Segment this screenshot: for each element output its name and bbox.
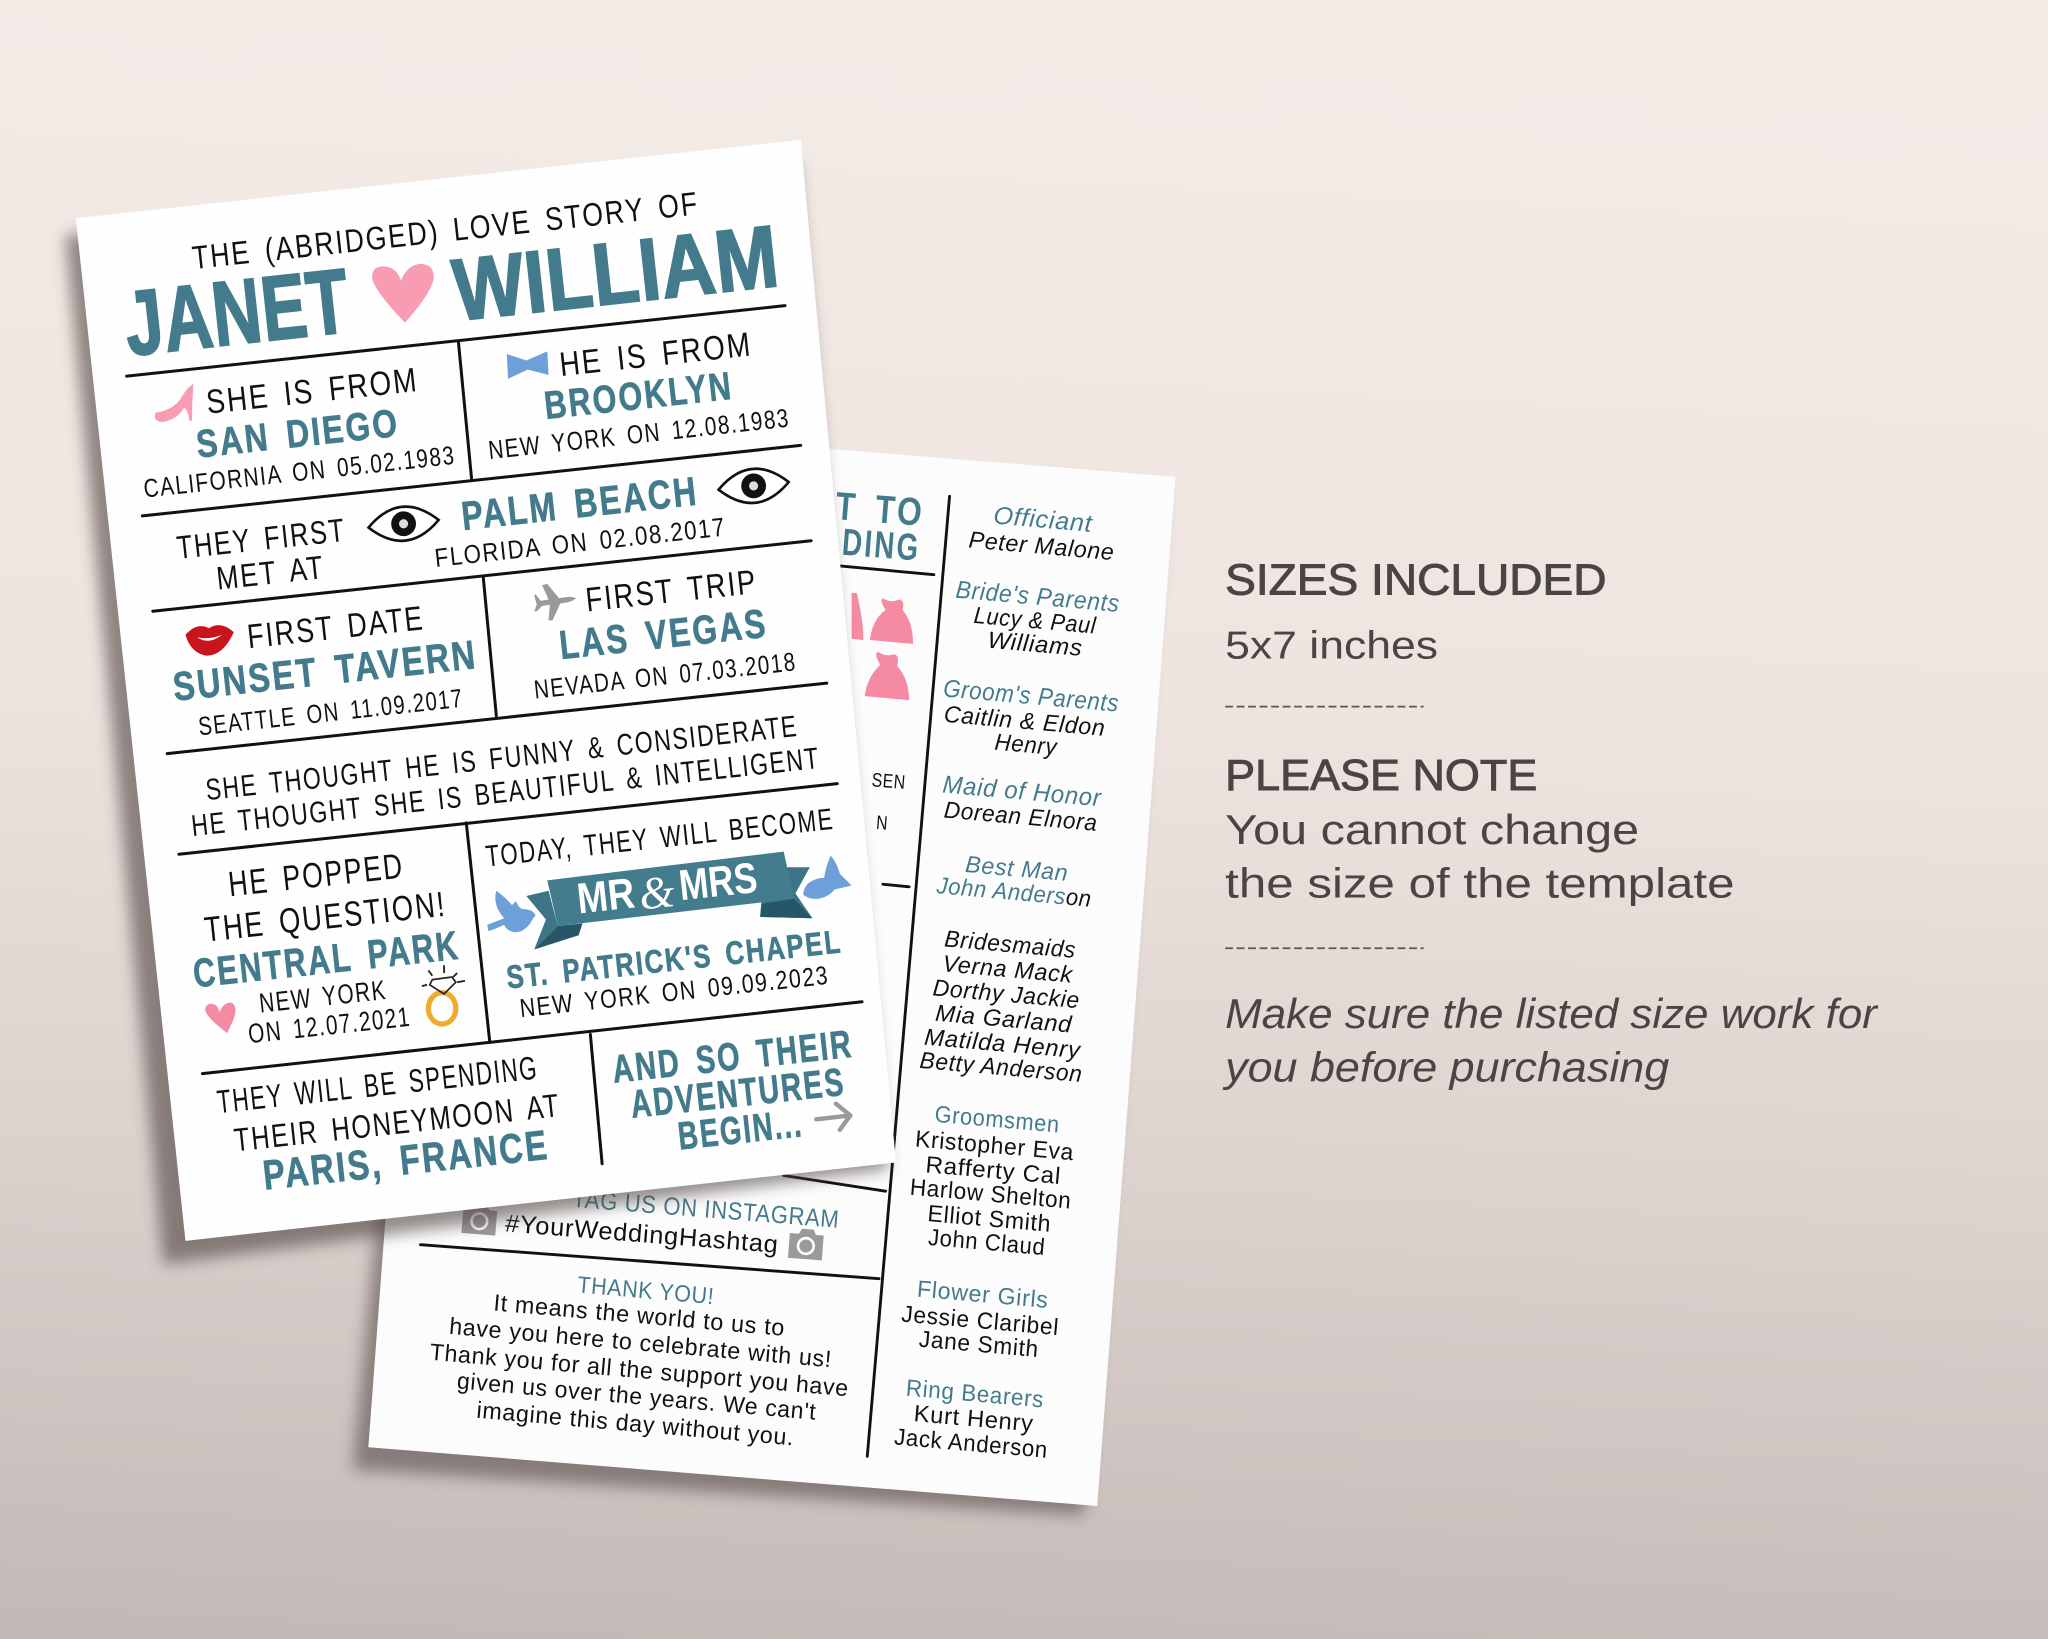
grooms parents: Groom's Parents bbox=[942, 675, 1120, 718]
proposal text: HE POPPED bbox=[226, 847, 406, 904]
section: honeymoon bbox=[215, 1049, 562, 1199]
date: NEW YORK bbox=[258, 974, 388, 1019]
size value: 5x7 inches bbox=[1225, 624, 1438, 667]
honeymoon text: THEY WILL BE SPENDING bbox=[215, 1049, 540, 1120]
icon: small heart bbox=[205, 1003, 235, 1033]
groomsman name: John Claud bbox=[927, 1224, 1047, 1260]
icon: plane bbox=[534, 584, 576, 620]
first met text: MET AT bbox=[215, 548, 326, 597]
back card shadow bbox=[353, 438, 1162, 1515]
bridesmaid name: Matilda Henry bbox=[923, 1024, 1082, 1063]
icon: camera right bbox=[788, 1228, 824, 1260]
fragment text: SEN bbox=[871, 769, 906, 794]
date: FLORIDA ON 02.08.2017 bbox=[433, 512, 727, 573]
section: she is from bbox=[142, 361, 457, 504]
place: CENTRAL PARK bbox=[191, 922, 462, 996]
maid of honor name: Dorean Elnora bbox=[943, 797, 1099, 836]
note line: the size of the template bbox=[1225, 859, 1735, 906]
name: William: WILLIAM bbox=[448, 207, 783, 340]
date: SEATTLE ON 11.09.2017 bbox=[197, 683, 465, 741]
section: adventures bbox=[610, 1023, 855, 1159]
icon: pink dress bbox=[865, 652, 909, 700]
icon: dove left bbox=[487, 891, 536, 932]
he is from text: HE IS FROM bbox=[558, 325, 754, 384]
icon: heart bbox=[372, 264, 434, 323]
hashtag: #YourWeddingHashtag bbox=[504, 1210, 780, 1259]
heading: sizes included: SIZES INCLUDED bbox=[1225, 556, 1607, 604]
groomsman name: Rafferty Cal bbox=[925, 1151, 1062, 1189]
icon: diamond ring bbox=[422, 965, 465, 1024]
maid of honor: Maid of Honor bbox=[941, 771, 1104, 812]
groomsmen: Groomsmen bbox=[934, 1101, 1061, 1138]
title line: THE (ABRIDGED) LOVE STORY OF bbox=[190, 184, 701, 276]
today text: TODAY, THEY WILL BECOME bbox=[484, 803, 836, 874]
thank you line: It means the world to us to bbox=[493, 1289, 786, 1341]
banner bbox=[526, 852, 812, 950]
icon: bow tie bbox=[507, 351, 549, 379]
first met text: THEY FIRST bbox=[175, 511, 348, 566]
section: mr and mrs bbox=[484, 803, 852, 1023]
best man: Best Man bbox=[964, 851, 1069, 886]
bridesmaid name: Verna Mack bbox=[942, 950, 1074, 988]
arrow bbox=[816, 1104, 850, 1130]
ring bearers: Ring Bearers bbox=[905, 1375, 1045, 1412]
place: SUNSET TAVERN bbox=[171, 631, 479, 710]
section: first trip bbox=[532, 563, 798, 705]
back card dividers bbox=[421, 496, 950, 1456]
ring bearer name: Jack Anderson bbox=[893, 1423, 1049, 1463]
proposal text: THE QUESTION! bbox=[202, 885, 448, 950]
italic note line: you before purchasing bbox=[1222, 1043, 1669, 1090]
honeymoon text: THEIR HONEYMOON AT bbox=[232, 1086, 562, 1158]
thank you line: have you here to celebrate with us! bbox=[448, 1313, 833, 1372]
back heading fragment: DING bbox=[841, 522, 922, 570]
bridesmaid name: Dorthy Jackie bbox=[932, 974, 1081, 1013]
banner text: MRS bbox=[677, 854, 760, 910]
note line: You cannot change bbox=[1225, 806, 1639, 853]
front card shadow bbox=[65, 163, 888, 1264]
thank you line: imagine this day without you. bbox=[476, 1397, 795, 1450]
panel: notes bbox=[1222, 556, 1879, 1090]
date: NEW YORK ON 09.09.2023 bbox=[518, 960, 830, 1023]
bridesmaid name: Mia Garland bbox=[934, 1000, 1073, 1038]
first date text: FIRST DATE bbox=[245, 599, 426, 656]
best man name: John Anderson bbox=[935, 872, 1093, 912]
she is from text: SHE IS FROM bbox=[204, 361, 420, 422]
bridesmaids: Bridesmaids bbox=[943, 926, 1077, 963]
brides parents name: Williams bbox=[987, 627, 1084, 661]
closing line: BEGIN... bbox=[676, 1102, 805, 1159]
section: proposal bbox=[191, 847, 465, 1049]
icon: dove right bbox=[803, 856, 852, 899]
groomsman name: Elliot Smith bbox=[926, 1200, 1052, 1237]
section: he is from bbox=[487, 325, 791, 465]
first trip text: FIRST TRIP bbox=[584, 563, 759, 619]
icon: eye right bbox=[717, 465, 791, 507]
place: PARIS, FRANCE bbox=[261, 1121, 551, 1199]
icon: high heel bbox=[155, 384, 193, 422]
brides parents name: Lucy & Paul bbox=[973, 602, 1097, 639]
grooms parents name: Caitlin & Eldon bbox=[943, 701, 1107, 741]
place: ST. PATRICK'S CHAPEL bbox=[505, 922, 844, 996]
section: first date bbox=[171, 599, 479, 741]
panel: back card bbox=[353, 418, 1176, 1515]
place: SAN DIEGO bbox=[194, 402, 401, 467]
bridesmaid name: Betty Anderson bbox=[919, 1047, 1084, 1087]
officiant name: Peter Malone bbox=[968, 527, 1116, 565]
flower girl name: Jane Smith bbox=[918, 1326, 1040, 1362]
instagram heading: TAG US ON INSTAGRAM bbox=[571, 1186, 840, 1234]
groomsman name: Kristopher Eva bbox=[914, 1125, 1075, 1165]
groomsman name: Harlow Shelton bbox=[909, 1174, 1073, 1214]
thank you line: Thank you for all the support you have bbox=[429, 1339, 850, 1401]
place: PALM BEACH bbox=[459, 468, 700, 539]
icon: pink dress bbox=[870, 598, 913, 644]
italic note line: Make sure the listed size work for bbox=[1225, 990, 1879, 1037]
front card dividers bbox=[127, 306, 862, 1164]
ring bearer name: Kurt Henry bbox=[913, 1400, 1035, 1437]
thank you heading: THANK YOU! bbox=[576, 1271, 715, 1309]
icon: lips gap bbox=[197, 635, 222, 641]
front card paper bbox=[76, 140, 896, 1241]
section: she thought he thought bbox=[190, 710, 822, 843]
place: LAS VEGAS bbox=[557, 600, 770, 668]
banner text: MR bbox=[575, 869, 637, 923]
grooms parents name: Henry bbox=[994, 729, 1059, 760]
banner ampersand: & bbox=[636, 865, 677, 920]
heading: please note: PLEASE NOTE bbox=[1225, 752, 1537, 800]
she thought: SHE THOUGHT HE IS FUNNY & CONSIDERATE bbox=[204, 710, 800, 807]
panel: front card bbox=[65, 140, 896, 1264]
icon: camera left bbox=[461, 1203, 498, 1236]
officiant: Officiant bbox=[992, 502, 1094, 538]
flower girl name: Jessie Claribel bbox=[900, 1301, 1060, 1340]
thank you line: given us over the years. We can't bbox=[456, 1367, 817, 1425]
closing line: AND SO THEIR bbox=[610, 1023, 855, 1092]
fragment text: N bbox=[875, 812, 889, 835]
flower girls: Flower Girls bbox=[916, 1276, 1050, 1313]
brides parents: Bride's Parents bbox=[955, 577, 1121, 618]
closing line: ADVENTURES bbox=[628, 1061, 847, 1127]
icon: lips bbox=[185, 625, 234, 656]
back heading fragment: T TO bbox=[834, 485, 926, 535]
back card paper bbox=[368, 418, 1176, 1506]
icon: dress sliver bbox=[852, 593, 863, 640]
date: ON 12.07.2021 bbox=[247, 1001, 412, 1049]
date: NEW YORK ON 12.08.1983 bbox=[487, 403, 791, 465]
section: first met bbox=[175, 465, 791, 597]
date: CALIFORNIA ON 05.02.1983 bbox=[142, 440, 457, 504]
name: Janet: JANET bbox=[120, 250, 354, 376]
he thought: HE THOUGHT SHE IS BEAUTIFUL & INTELLIGENT bbox=[190, 742, 822, 843]
date: NEVADA ON 07.03.2018 bbox=[532, 646, 798, 705]
icon: eye left bbox=[367, 503, 440, 544]
place: BROOKLYN bbox=[542, 365, 735, 428]
